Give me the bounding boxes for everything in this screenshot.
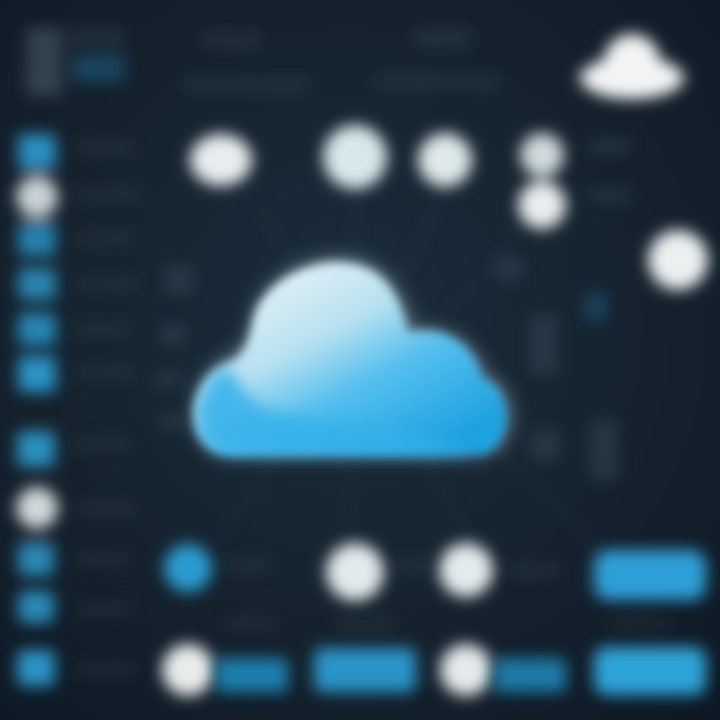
bottom blue pill buttons bbox=[216, 550, 706, 695]
faint radiating connector lines bbox=[220, 190, 600, 550]
title placeholder blocks bbox=[26, 28, 500, 96]
bottom text lines bbox=[225, 558, 670, 630]
faint mid-side glyphs bbox=[155, 140, 630, 480]
main cloud icon bbox=[194, 257, 512, 456]
small blue glyph bbox=[585, 293, 607, 321]
icon: top-right cloud bbox=[580, 34, 684, 99]
top row white circle icons bbox=[190, 125, 566, 229]
cloud glow bbox=[194, 257, 512, 456]
cloud blue lower-left lobe bbox=[198, 366, 476, 454]
right white circle icon bbox=[648, 230, 708, 290]
bottom blue circle icon bbox=[164, 544, 212, 592]
left column upper icons bbox=[16, 134, 58, 392]
left column lower text lines bbox=[75, 438, 135, 675]
left column upper text lines bbox=[75, 141, 140, 378]
bottom white circle icons bbox=[162, 543, 493, 696]
left column lower icons bbox=[16, 431, 58, 686]
cloud body bbox=[194, 262, 506, 454]
